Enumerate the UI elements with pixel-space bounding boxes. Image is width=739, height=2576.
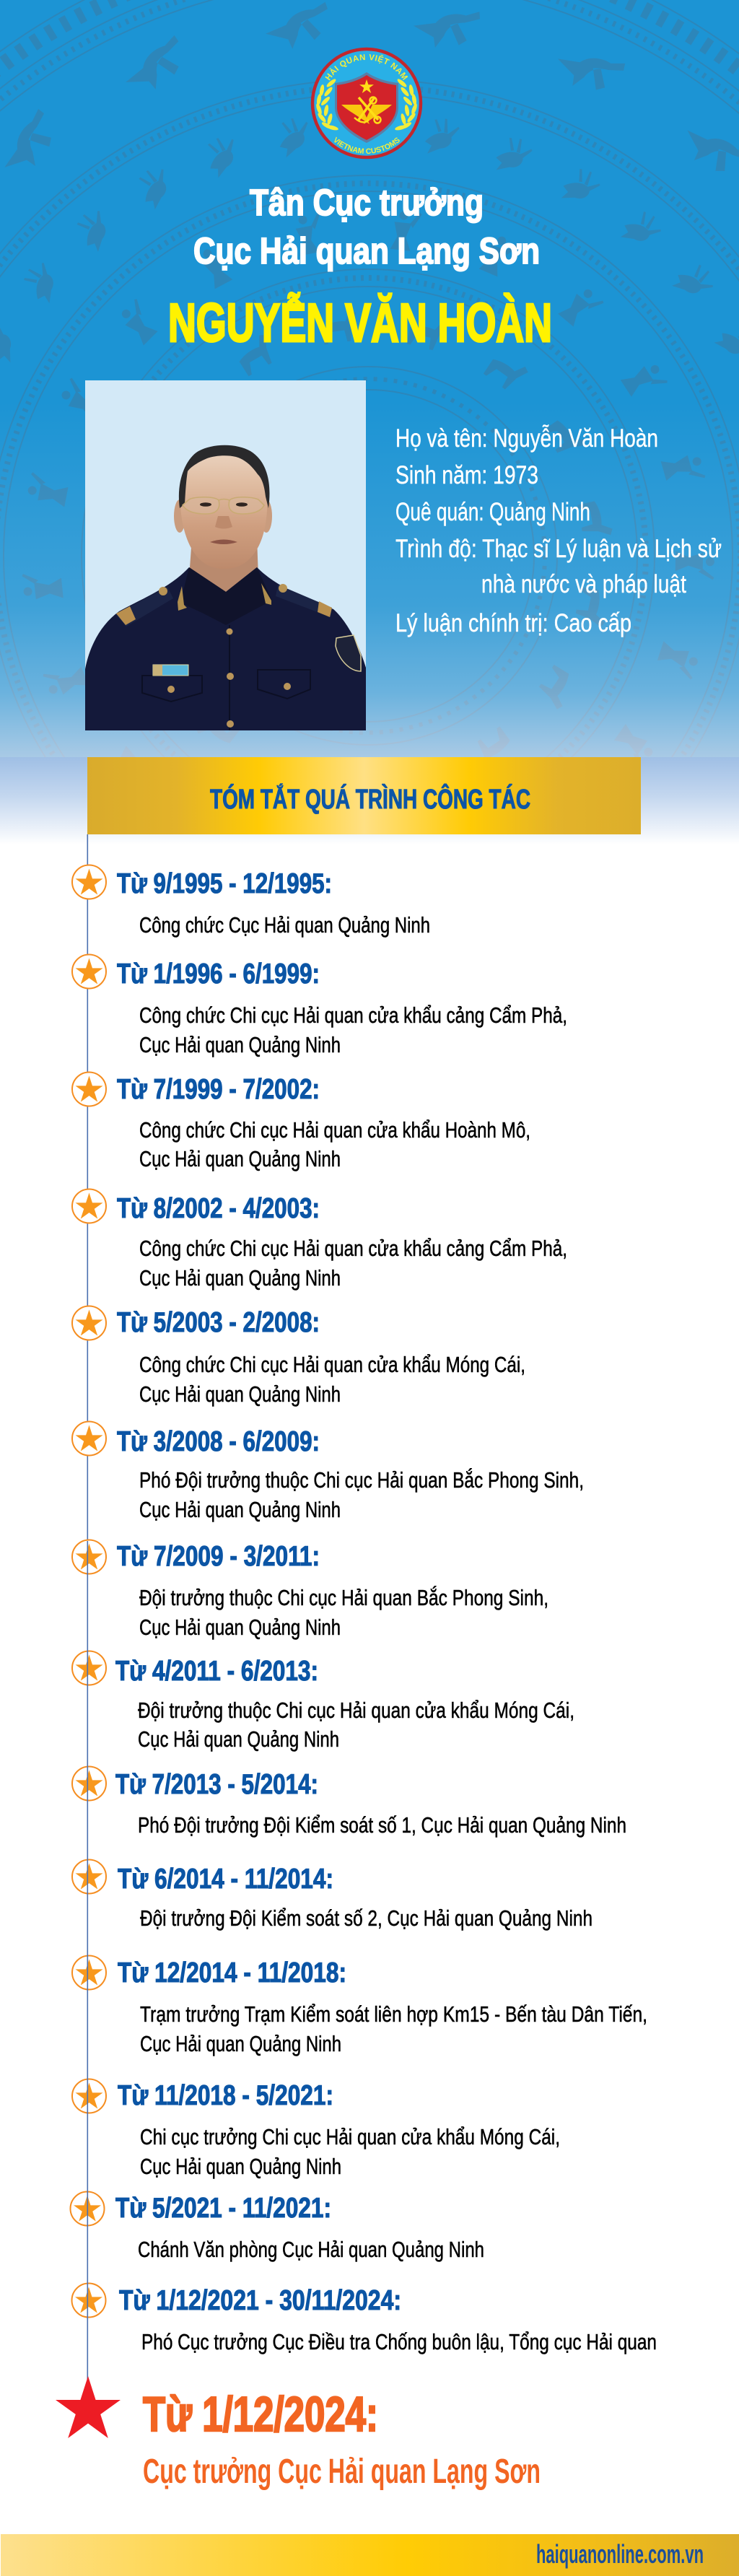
title: Tân Cục trưởng [250,182,484,223]
entry 14: Từ 1/12/2021 - 30/11/2024: [119,2285,401,2316]
portrait photo [85,380,366,730]
uniform [85,567,366,730]
entry 3: Công chức Chi cục Hải quan cửa khẩu Hoành Mô, [139,1117,530,1143]
personal info text: nhà nước và pháp luật [481,570,686,598]
entry 12 [72,2079,560,2179]
current position: Cục trưởng Cục Hải quan Lạng Sơn [143,2453,541,2491]
entry 2: Từ 1/1996 - 6/1999: [117,959,320,990]
entry 5: Công chức Chi cục Hải quan cửa khẩu Móng Cái, [139,1352,525,1377]
entry 13: Chánh Văn phòng Cục Hải quan Quảng Ninh [138,2237,484,2262]
entry 11 [72,1956,647,2056]
entry 9: Từ 7/2013 - 5/2014: [115,1769,318,1800]
entry 2: Cục Hải quan Quảng Ninh [139,1032,341,1057]
epaulette left [115,587,173,626]
icon: customs emblem: HẢI QUAN VIỆT NAM [325,54,408,81]
entry 10: Từ 6/2014 - 11/2014: [118,1864,333,1895]
personal info text: Lý luận chính trị: Cao cấp [395,609,631,637]
entry 11: Cục Hải quan Quảng Ninh [140,2031,341,2056]
name tag [153,665,188,676]
personal info text: Quê quán: Quảng Ninh [395,498,590,526]
entry 4: Cục Hải quan Quảng Ninh [139,1265,341,1291]
buttons [167,628,291,728]
timeline line lower part [87,1541,88,2382]
entry 12: Chi cục trưởng Chi cục Hải quan cửa khẩu Móng Cái, [140,2124,560,2149]
entry 8: Đội trưởng thuộc Chi cục Hải quan cửa khẩu Móng Cái, [138,1698,574,1723]
entry 12: Từ 11/2018 - 5/2021: [118,2080,333,2111]
entry 10: Đội trưởng Đội Kiểm soát số 2, Cục Hải quan Quảng Ninh [140,1905,592,1931]
entry 4 [72,1189,567,1291]
entry 7: Đội trưởng thuộc Chi cục Hải quan Bắc Phong Sinh, [139,1585,548,1610]
collar pins [178,583,271,611]
shirt collar [180,567,272,625]
entry 12: Cục Hải quan Quảng Ninh [140,2154,341,2179]
neck [190,548,258,592]
glasses [183,497,264,514]
entry 3: Cục Hải quan Quảng Ninh [139,1146,341,1171]
personal info text [395,424,722,637]
icon: left laurel [315,78,338,131]
entry 5 [72,1306,525,1407]
section banner [87,757,641,834]
eyes [200,502,248,507]
entry 8 [72,1651,574,1752]
entry 6: Cục Hải quan Quảng Ninh [139,1497,341,1522]
pocket flaps [142,625,310,730]
icon: right laurel [395,78,418,131]
icon: red star [56,2376,121,2438]
entry 8: Từ 4/2011 - 6/2013: [115,1656,318,1687]
section banner: TÓM TẮT QUÁ TRÌNH CÔNG TÁC [210,782,530,815]
entry 7: Cục Hải quan Quảng Ninh [139,1615,341,1640]
entry 6 [72,1422,584,1522]
entry 2 [72,954,567,1057]
entry 13: Từ 5/2021 - 11/2021: [115,2193,331,2224]
entry 6: Phó Đội trưởng thuộc Chi cục Hải quan Bắc Phong Sinh, [139,1467,584,1493]
personal info text: Sinh năm: 1973 [395,461,538,489]
ears [174,499,272,533]
drum pattern background [0,0,739,757]
title [193,182,540,271]
entry 7: Từ 7/2009 - 3/2011: [117,1541,320,1572]
head [180,455,267,559]
entry 13 [71,2191,484,2262]
current position: Từ 1/12/2024: [143,2387,378,2442]
entry 14 [72,2284,657,2354]
entry 6: Từ 3/2008 - 6/2009: [117,1426,320,1457]
entry 2: Công chức Chi cục Hải quan cửa khẩu cảng Cẩm Phả, [139,1003,567,1028]
entry 3 [72,1073,530,1171]
entry 4: Công chức Chi cục Hải quan cửa khẩu cảng Cẩm Phả, [139,1236,567,1261]
sleeve badge [336,635,361,671]
epaulette right [276,584,332,617]
entry 4: Từ 8/2002 - 4/2003: [117,1193,320,1224]
entry 9 [72,1767,626,1838]
entry 11: Từ 12/2014 - 11/2018: [118,1957,346,1988]
current position [143,2387,541,2491]
mouth [210,540,237,544]
entry 1: Từ 9/1995 - 12/1995: [117,868,332,899]
entry 8: Cục Hải quan Quảng Ninh [138,1726,339,1752]
icon: customs emblem: VIETNAM CUSTOMS [334,137,400,154]
timeline line [87,834,88,1556]
entry 10 [72,1859,592,1931]
entry 3: Từ 7/1999 - 7/2002: [117,1074,320,1105]
nose [215,516,232,528]
entry 7 [72,1540,548,1640]
icon: customs emblem [310,48,423,159]
personal info text: Họ và tên: Nguyễn Văn Hoàn [395,424,658,453]
timeline entries [71,865,657,2354]
entry 5: Từ 5/2003 - 2/2008: [117,1307,320,1338]
title: Cục Hải quan Lạng Sơn [193,230,540,271]
header fade overlay [0,0,739,757]
hair [179,445,269,508]
entry 5: Cục Hải quan Quảng Ninh [139,1381,341,1407]
header background [0,0,739,844]
footer bar [1,2534,739,2576]
entry 1 [72,865,430,938]
entry 1: Công chức Cục Hải quan Quảng Ninh [139,912,430,938]
name heading: NGUYỄN VĂN HOÀN [168,292,552,353]
